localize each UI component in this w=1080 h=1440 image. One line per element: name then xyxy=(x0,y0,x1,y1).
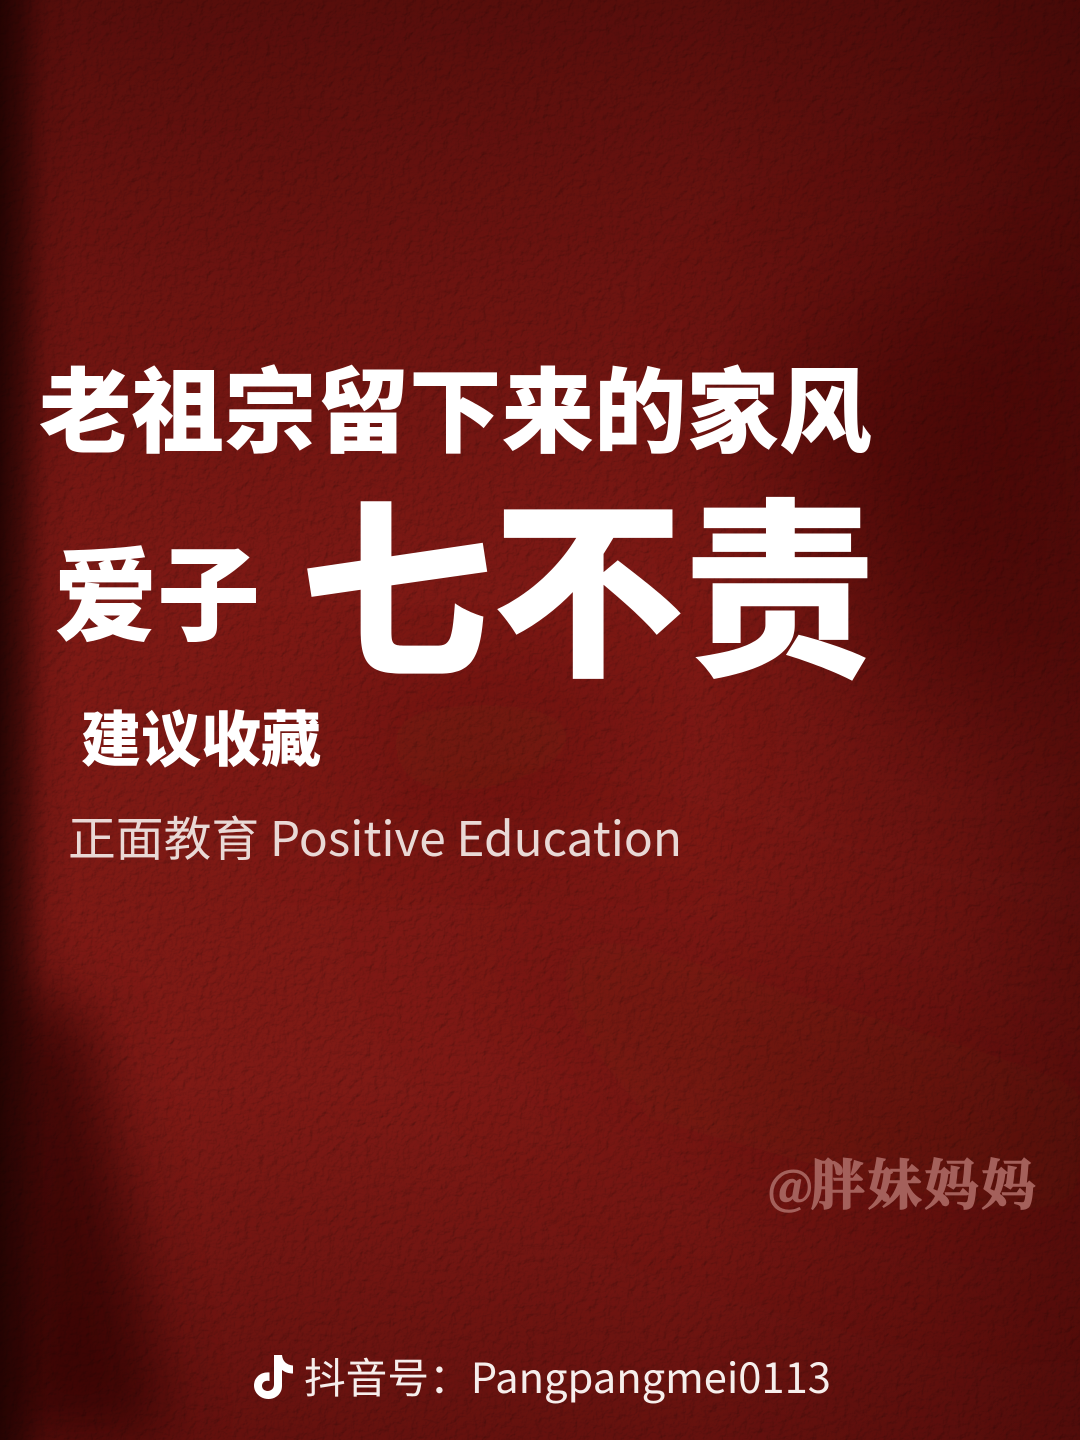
text: Douyin ID: 抖音号：Pangpangmei0113 xyxy=(304,1346,831,1406)
subtitle: positive education: 正面教育 Positive Education xyxy=(68,801,682,870)
subheading: recommend saving: 建议收藏 xyxy=(81,692,321,779)
heading: love for children: 爱子 xyxy=(54,513,260,662)
title: inherited family tradition: 老祖宗留下来的家风 xyxy=(39,338,872,472)
watermark: author name: @胖妹妈妈 xyxy=(768,1143,1039,1220)
heading: seven do-not-blames: 七不责 xyxy=(300,439,876,717)
footer: Douyin account xyxy=(254,1346,831,1406)
icon: Douyin note xyxy=(254,1355,293,1399)
